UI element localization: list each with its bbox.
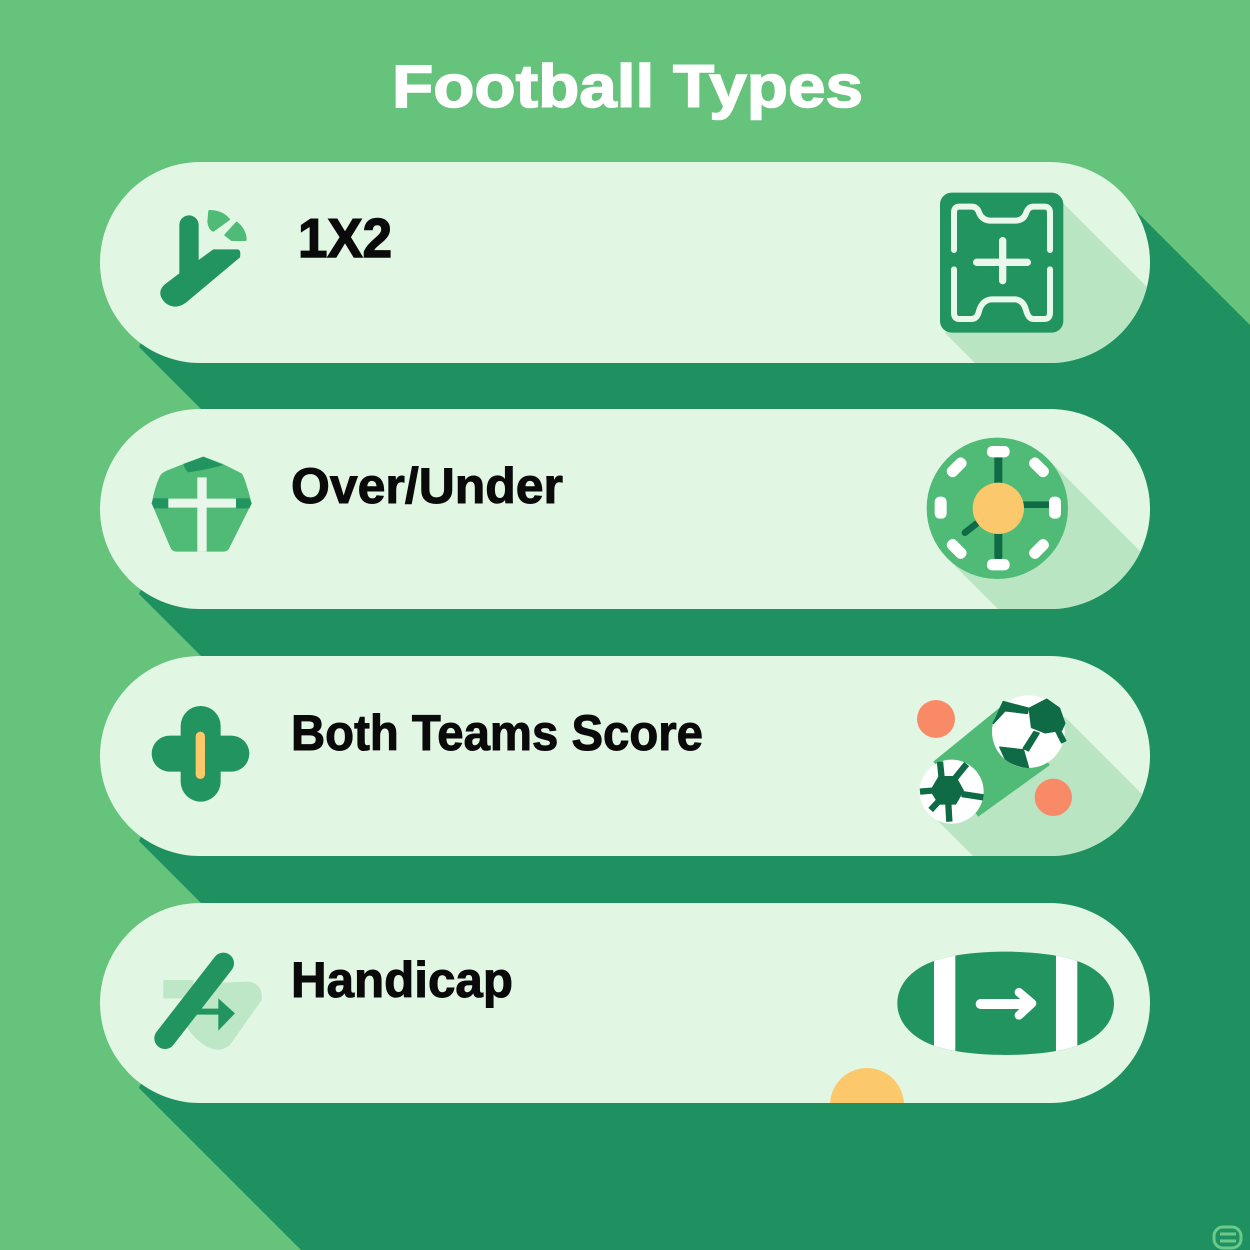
card background	[100, 903, 1150, 1103]
panel: Over/Under	[100, 409, 1150, 609]
icon shadow	[937, 717, 1142, 856]
ball one	[992, 695, 1066, 768]
card background	[100, 409, 1150, 609]
label: Both Teams Score: Both Teams Score	[291, 705, 703, 761]
icon shadow	[945, 203, 1147, 363]
icon: two soccer balls	[917, 695, 1072, 824]
label: 1X2: 1X2	[298, 207, 392, 269]
watermark logo	[1214, 1227, 1241, 1248]
ball two	[920, 760, 984, 824]
icon: roulette dial	[927, 438, 1068, 579]
icon shadow	[947, 458, 1140, 609]
icon: diagonal bar with arrow	[163, 963, 262, 1050]
label: Over/Under: Over/Under	[291, 458, 563, 514]
card background	[100, 656, 1150, 856]
icon: goal post with wedges	[160, 211, 246, 307]
decorative yellow semicircle	[830, 1068, 904, 1103]
panel: 1X2	[100, 162, 1225, 365]
title: Football Types	[392, 53, 863, 120]
panel: Handicap	[100, 903, 1150, 1103]
long diagonal shadows of the cards	[139, 196, 1250, 1250]
icon: american football with arrow	[897, 947, 1114, 1060]
label: Handicap: Handicap	[291, 952, 513, 1008]
icon: pitch with plus	[940, 193, 1063, 333]
panel: Both Teams Score	[100, 656, 1150, 856]
icon: shield with cross	[152, 457, 252, 552]
icon: plus shape with bar	[152, 706, 249, 802]
card background	[100, 162, 1150, 363]
